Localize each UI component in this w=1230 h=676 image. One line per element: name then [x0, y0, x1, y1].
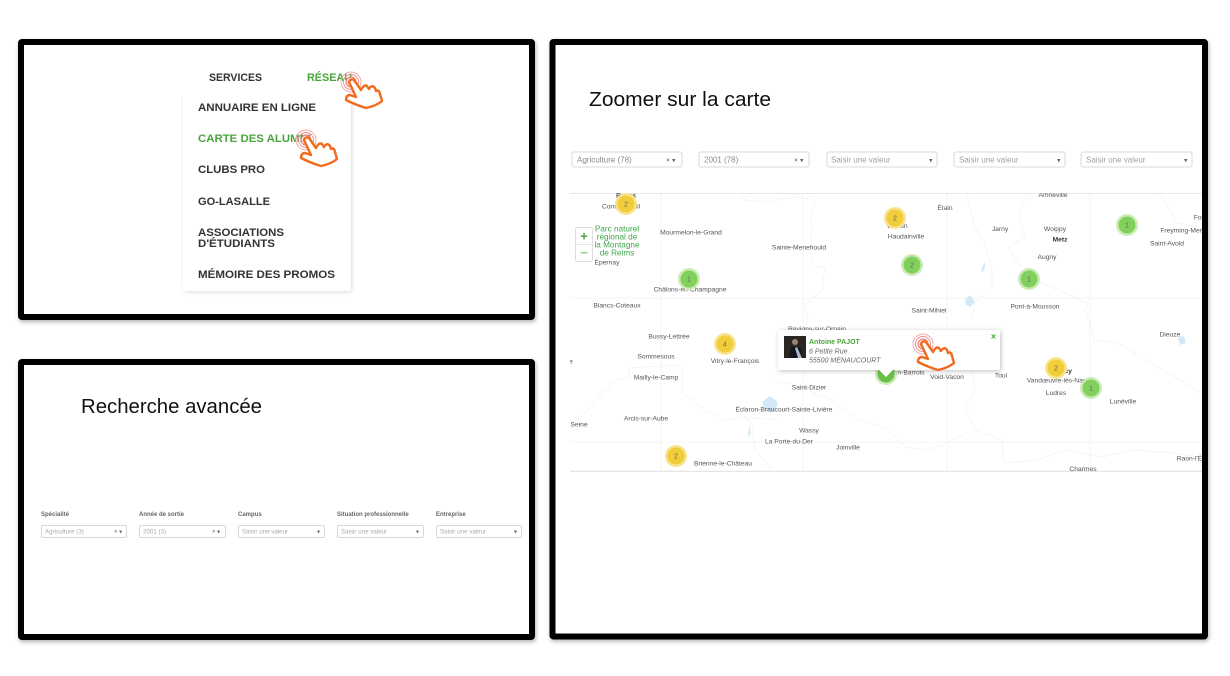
yellow clusters: 2	[624, 202, 628, 208]
filter: situation professionnelle: Situation professionnelle	[337, 512, 409, 518]
place labels: Sommesous	[637, 354, 675, 360]
menu item: mémoire des promos: MÉMOIRE DES PROMOS	[198, 268, 335, 281]
place labels: Woippy	[1044, 226, 1067, 233]
place labels: Verdun	[886, 223, 908, 230]
park label: régional de	[597, 232, 638, 242]
place labels: Cormontreuil	[602, 204, 641, 210]
filter: année 2001: × ▾	[794, 158, 804, 164]
filter: empty 1: Saisir une valeur	[831, 156, 891, 164]
green clusters	[678, 214, 1138, 399]
menu item: annuaire: ANNUAIRE EN LIGNE	[198, 102, 316, 114]
yellow clusters	[615, 193, 1067, 467]
green clusters: 1	[1089, 386, 1093, 392]
park label	[595, 226, 640, 256]
place labels: Blancs-Coteaux	[593, 302, 641, 310]
panel: recherche avancée	[21, 362, 532, 637]
filter: spécialité: Agriculture (3)	[45, 528, 84, 536]
popup: alumni card	[778, 330, 1000, 377]
place labels: Haudainville	[888, 234, 924, 240]
menu item: réseau: RÉSEAU	[307, 71, 352, 84]
place labels: Wassy	[799, 428, 820, 434]
place labels: Revigny-sur-Ornain	[788, 326, 846, 333]
place labels: Vandœuvre-lès-Nancy	[1027, 378, 1094, 384]
yellow clusters: 2	[1054, 366, 1058, 372]
menu item: d'étudiants: D'ÉTUDIANTS	[198, 237, 275, 250]
green clusters: 1	[1125, 222, 1129, 230]
menu item: associations: ASSOCIATIONS	[198, 227, 284, 239]
filter: année 2001	[699, 152, 809, 167]
place labels: Étain	[937, 203, 953, 212]
zoom control: −	[580, 245, 588, 260]
dropdown card	[183, 80, 351, 291]
zoom control	[576, 228, 592, 262]
filter: campus: ▾	[317, 530, 320, 536]
filter: agriculture: × ▾	[666, 158, 676, 164]
place labels: Saint-Mihiel	[912, 308, 947, 314]
place labels: Mourmelon-le-Grand	[660, 230, 722, 236]
place labels: Mailly-le-Camp	[634, 374, 679, 382]
menu item: clubs pro: CLUBS PRO	[198, 164, 265, 176]
address: 6 Petite Rue	[809, 348, 848, 356]
place labels: e	[569, 358, 573, 366]
place labels: Ligny-en-Barrois	[875, 370, 925, 376]
heading: recherche avancée: Recherche avancée	[81, 396, 262, 418]
filter: empty 3: ▾	[1184, 158, 1188, 164]
filter: empty 2	[954, 152, 1065, 167]
filter: spécialité: × ▾	[114, 530, 122, 536]
place labels: Saint-Avold	[1150, 240, 1184, 248]
place labels	[569, 192, 1222, 473]
place labels: Nancy	[1052, 368, 1072, 375]
green clusters: 1	[1027, 276, 1031, 284]
place labels: Amnéville	[1038, 192, 1068, 199]
filter: entreprise: ▾	[514, 530, 517, 536]
place labels: Brienne-le-Château	[694, 460, 752, 468]
place labels: Charmes	[1069, 466, 1097, 473]
filter: campus: Campus	[238, 512, 262, 518]
place labels: Dieuze	[1160, 332, 1181, 338]
filter: empty 1: ▾	[929, 158, 933, 164]
yellow clusters: 2	[893, 216, 897, 222]
filter: empty 2: Saisir une valeur	[959, 156, 1019, 164]
menu item: go-lasalle: GO-LASALLE	[198, 196, 270, 208]
place labels: Jarny	[992, 226, 1009, 233]
filter: situation professionnelle: ▾	[416, 530, 419, 536]
place labels: Éclaron-Braucourt-Sainte-Livière	[735, 404, 833, 414]
filter: empty 3	[1081, 152, 1192, 167]
place labels: Seine	[570, 422, 588, 428]
panel: navigation menu	[21, 42, 532, 317]
filter: campus: Saisir une valeur	[242, 528, 288, 536]
place labels: Augny	[1038, 254, 1057, 261]
icon: hand cursor on popup	[913, 334, 954, 370]
place labels: Reims	[616, 192, 636, 200]
place labels: Épernay	[595, 258, 620, 266]
place labels: La Porte-du-Der	[765, 438, 814, 446]
place labels: Arcis-sur-Aube	[624, 416, 668, 422]
panel: zoomer sur la carte	[552, 42, 1222, 636]
filter: empty 1	[827, 152, 937, 167]
park label: la Montagne	[594, 240, 640, 250]
yellow clusters: 2	[674, 454, 678, 460]
zoom control: +	[580, 228, 588, 244]
place labels: Raon-l'Étape	[1177, 454, 1216, 462]
filter: campus	[238, 512, 324, 538]
place labels: Forbach	[1194, 214, 1219, 222]
filter: empty 2: ▾	[1057, 158, 1061, 164]
icon: hand cursor on réseau	[341, 72, 382, 108]
filter: entreprise: Saisir une valeur	[440, 528, 486, 536]
place labels: Lunéville	[1110, 398, 1136, 406]
filter: année de sortie: Année de sortie	[139, 512, 185, 518]
address	[809, 348, 881, 364]
filter: spécialité: Spécialité	[41, 512, 70, 518]
park label: Parc naturel	[595, 224, 639, 234]
filter: spécialité	[41, 512, 126, 538]
filter: année de sortie: 2001 (3)	[143, 528, 166, 536]
filter: entreprise: Entreprise	[436, 512, 466, 518]
map	[569, 192, 1222, 473]
place labels: Pont-à-Mousson	[1010, 304, 1060, 310]
photo	[784, 336, 806, 358]
place labels: Saint-Dizier	[792, 384, 827, 392]
place labels: Joinville	[836, 444, 860, 452]
filter: année de sortie: × ▾	[212, 530, 220, 536]
place labels: Châlons-en-Champagne	[654, 286, 727, 294]
place labels: Ludres	[1046, 390, 1067, 397]
filter: année 2001: 2001 (78)	[704, 156, 739, 164]
address: 55500 MENAUCOURT	[809, 358, 881, 364]
name: Antoine PAJOT	[809, 339, 861, 346]
filter: agriculture: Agriculture (78)	[577, 156, 632, 164]
place labels: Vitry-le-François	[711, 358, 760, 365]
park label: de Reims	[600, 248, 634, 258]
menu item: services: SERVICES	[209, 72, 262, 84]
green clusters: 1	[687, 276, 691, 284]
filter: situation professionnelle	[337, 512, 424, 538]
place labels: Freyming-Merlebach	[1160, 228, 1222, 234]
place labels: Toul	[995, 372, 1008, 380]
filter: entreprise	[436, 512, 522, 538]
place labels: Sainte-Menehould	[772, 244, 826, 252]
menu item: carte des alumni: CARTE DES ALUMNI	[198, 133, 311, 145]
green clusters: 2	[910, 262, 914, 270]
filter: situation professionnelle: Saisir une valeur	[341, 528, 387, 536]
yellow clusters: 4	[723, 342, 727, 348]
filter: agriculture	[572, 152, 682, 167]
filter: année de sortie	[139, 512, 226, 538]
place labels: Bussy-Lettrée	[648, 334, 690, 340]
water bodies	[748, 262, 1186, 437]
place labels: Void-Vacon	[930, 374, 964, 381]
filter: empty 3: Saisir une valeur	[1086, 156, 1146, 164]
close icon: ×	[991, 332, 996, 342]
heading: zoomer sur la carte: Zoomer sur la carte	[589, 89, 771, 111]
place labels: Metz	[1053, 236, 1068, 244]
icon: hand cursor on carte des alumni	[296, 130, 337, 166]
